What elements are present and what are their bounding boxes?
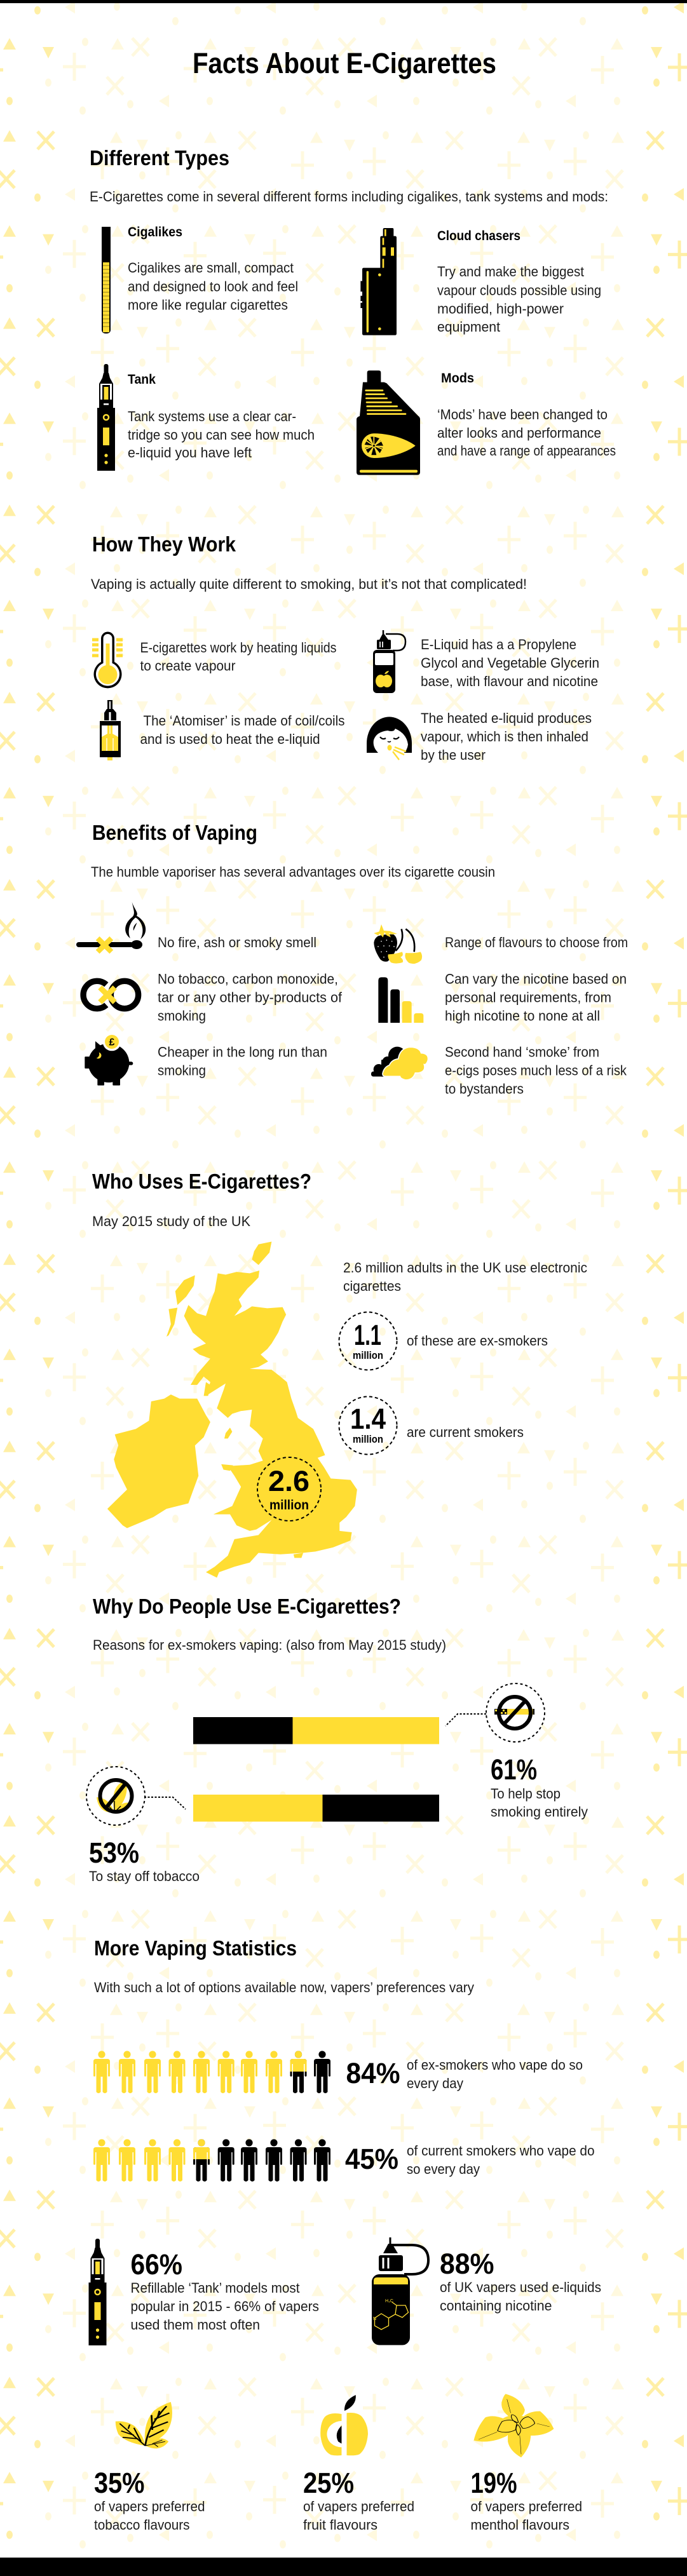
callout: 2.6 million xyxy=(257,1457,321,1521)
stat: 25%: 25% xyxy=(303,2467,354,2499)
text: second hand smoke: e-cigs poses much less of a risk xyxy=(445,1062,627,1079)
stat: 25%: of vapers preferred xyxy=(303,2498,414,2514)
stat: 45%: so every day xyxy=(407,2161,480,2177)
text: current smokers: are current smokers xyxy=(407,1424,524,1440)
text: heated e-liquid xyxy=(421,710,592,763)
icon: e-liquid bottle xyxy=(373,630,405,693)
callout: 1.1 million: 1.1 xyxy=(354,1319,381,1351)
text: cheaper: Cheaper in the long run than xyxy=(158,1044,327,1060)
icon: nicotine bars xyxy=(378,977,423,1023)
text: cigalikes: Cigalikes are small, compact xyxy=(128,260,294,276)
stat: 19% xyxy=(470,2467,582,2533)
stat: 88%: containing nicotine xyxy=(440,2298,552,2314)
text: nicotine: high nicotine to none at all xyxy=(445,1008,600,1024)
icon: thermometer xyxy=(92,632,123,688)
icon: apple xyxy=(320,2395,368,2455)
stat: 19%: menthol flavours xyxy=(470,2517,569,2533)
stat: 61%: To help stop xyxy=(491,1786,561,1802)
icon: nicotine e-liquid bottle xyxy=(372,2237,428,2345)
panel: why do people use xyxy=(86,1595,588,1884)
text: cigalikes xyxy=(128,225,298,313)
stat: 45% xyxy=(345,2143,595,2177)
icon: tobacco leaf xyxy=(116,2402,172,2448)
icon: atomiser xyxy=(100,700,121,760)
icon: piggy bank xyxy=(85,1033,133,1086)
text: tank xyxy=(128,372,315,461)
callout: 2.6 million: million xyxy=(269,1498,309,1513)
callout: 1.4 million: 1.4 xyxy=(350,1403,386,1435)
text: atomiser: and is used to heat the e-liquid xyxy=(140,731,320,747)
text: 2.6 million adults: cigarettes xyxy=(343,1278,401,1294)
stat: 66%: used them most often xyxy=(131,2317,260,2333)
text: cigalikes: Cigalikes xyxy=(128,225,182,239)
text: heated e-liquid: by the user xyxy=(421,747,486,763)
icon: piggy bank: £ xyxy=(109,1037,115,1048)
stat: 35%: of vapers preferred xyxy=(94,2498,205,2514)
text: atomiser: The ‘Atomiser’ is made of coil/coils xyxy=(144,713,344,729)
text: tank: tridge so you can see how much xyxy=(128,427,315,443)
heading: how they work: How They Work xyxy=(92,532,236,556)
stat: 88% xyxy=(440,2248,601,2314)
text: tank: Tank xyxy=(128,372,156,387)
stat: 45%: of current smokers who vape do xyxy=(407,2143,595,2159)
callout: 1.4 million: million xyxy=(353,1433,383,1445)
stat: 61%: smoking entirely xyxy=(491,1804,588,1819)
panel: benefits of vaping xyxy=(79,821,628,1096)
text: cloud chasers: equipment xyxy=(437,319,500,335)
panel: different types xyxy=(90,146,616,475)
text: heated e-liquid: vapour, which is then inhaled xyxy=(421,729,588,745)
bar chart: 61% xyxy=(193,1717,439,1744)
text: cloud chasers: modified, high-power xyxy=(437,301,564,316)
stat: 84% xyxy=(346,2057,583,2091)
icon: face exhaling vapour xyxy=(367,717,412,760)
text: nicotine xyxy=(445,971,627,1024)
top black bar xyxy=(0,0,687,3)
stat: 66% xyxy=(131,2248,319,2333)
text: mods xyxy=(437,371,616,459)
callout: 1.1 million xyxy=(339,1312,397,1370)
text: nicotine: personal requirements, from xyxy=(445,990,611,1005)
icon: refillable tank xyxy=(89,2239,107,2345)
text: cloud chasers xyxy=(437,229,601,335)
stat: 19%: 19% xyxy=(470,2467,517,2499)
text: second hand smoke xyxy=(445,1044,627,1096)
text: nicotine: Can vary the nicotine based on xyxy=(445,971,627,987)
stat: 25% xyxy=(303,2467,414,2533)
text: atomiser xyxy=(140,713,344,747)
text: e-liquid xyxy=(421,637,599,689)
panel: more vaping statistics xyxy=(89,1936,601,2533)
intro: who uses: May 2015 study of the UK xyxy=(92,1213,250,1229)
text: e-liquid: E-Liquid has a a Propylene xyxy=(421,637,576,652)
icon: strawberry and cherries xyxy=(374,924,422,964)
heading: different types: Different Types xyxy=(90,146,229,170)
callout: 2.6 million: 2.6 xyxy=(268,1465,309,1497)
text: mods: ‘Mods’ have been changed to xyxy=(437,407,608,422)
text: no fire: No fire, ash or smoky smell xyxy=(158,934,316,950)
stat: 66%: popular in 2015 - 66% of vapers xyxy=(131,2298,319,2314)
stat: 61% xyxy=(491,1753,588,1819)
icon: mods bottle xyxy=(357,370,420,475)
text: cigalikes: more like regular cigarettes xyxy=(128,297,288,313)
stat: 45%: 45% xyxy=(345,2143,398,2175)
stat: 88%: 88% xyxy=(440,2248,494,2280)
text: cheaper xyxy=(158,1044,327,1079)
intro: benefits: The humble vaporiser has several advantages over its cigarette cousin xyxy=(91,864,495,880)
stat: 53% xyxy=(89,1837,200,1884)
text: second hand smoke: to bystanders xyxy=(445,1081,524,1096)
text: cloud chasers: Cloud chasers xyxy=(437,229,520,243)
intro: how they work: Vaping is actually quite different to smoking, but it’s not that complicated! xyxy=(91,576,527,592)
stat: 19%: of vapers preferred xyxy=(470,2498,582,2514)
title: Facts About E-Cigarettes xyxy=(193,47,496,79)
heading: benefits: Benefits of Vaping xyxy=(92,821,257,844)
stat: 88%: of UK vapers used e-liquids xyxy=(440,2279,601,2295)
panel: who uses e-cigarettes xyxy=(92,1170,587,1578)
stat: 66%: Refillable ‘Tank’ models most xyxy=(131,2280,300,2296)
text: tank: Tank systems use a clear car- xyxy=(128,408,296,424)
text: ex-smokers: of these are ex-smokers xyxy=(407,1333,548,1349)
text: no tobacco: tar or any other by-products of xyxy=(158,990,343,1005)
heading: why do people use: Why Do People Use E-Cigarettes? xyxy=(93,1595,401,1618)
stat: 66%: 66% xyxy=(131,2248,182,2281)
icon: menthol leaves xyxy=(473,2394,554,2457)
text: cheaper: smoking xyxy=(158,1062,206,1079)
pictogram: 45% of ten people xyxy=(93,2139,330,2182)
text: tank: e-liquid you have left xyxy=(128,445,252,461)
text: 2.6 million adults xyxy=(343,1260,587,1294)
stat: 61%: 61% xyxy=(491,1753,537,1786)
text: heating liquids: E-cigarettes work by heating liquids xyxy=(140,640,337,656)
text: heating liquids: to create vapour xyxy=(140,658,235,673)
icon: cigalike xyxy=(102,227,111,334)
stat: 25%: fruit flavours xyxy=(303,2517,378,2533)
intro: different types: E-Cigarettes come in several different forms including cigalikes, tank systems and mods: xyxy=(90,189,608,205)
text: cloud chasers: Try and make the biggest xyxy=(437,264,584,280)
bottom black bar xyxy=(0,2558,687,2576)
stat: 84%: 84% xyxy=(346,2057,400,2089)
icon: vapour cloud xyxy=(371,1047,428,1080)
stat: 84%: every day xyxy=(407,2075,463,2091)
heading: more vaping statistics: More Vaping Statistics xyxy=(94,1936,297,1960)
bar chart: 53% xyxy=(193,1795,439,1822)
intro: preferences: With such a lot of options available now, vapers’ preferences vary xyxy=(94,1979,474,1995)
stat: 84%: of ex-smokers who vape do so xyxy=(407,2057,583,2073)
text: no tobacco: smoking xyxy=(158,1008,206,1024)
text: flavours: Range of flavours to choose from xyxy=(445,934,628,950)
icon: tank xyxy=(97,364,115,471)
callout: 1.1 million: million xyxy=(353,1349,383,1361)
text: mods: and have a range of appearances xyxy=(437,443,616,459)
intro: reasons: Reasons for ex-smokers vaping: (also from May 2015 study) xyxy=(93,1637,446,1653)
text: no tobacco xyxy=(158,971,343,1024)
text: e-liquid: base, with flavour and nicotine xyxy=(421,673,598,689)
text: no tobacco: No tobacco, carbon monoxide, xyxy=(158,971,338,987)
icon: crossed carbon rings xyxy=(83,981,139,1009)
text: cloud chasers: vapour clouds possible using xyxy=(437,282,601,299)
text: e-liquid: Glycol and Vegetable Glycerin xyxy=(421,655,599,671)
stat: 53%: 53% xyxy=(89,1837,139,1869)
heading: who uses: Who Uses E-Cigarettes? xyxy=(92,1170,311,1193)
icon: crossed cigarette with flame xyxy=(79,902,146,952)
icon: no tobacco xyxy=(86,1767,186,1825)
molecule: N xyxy=(373,2317,376,2321)
stat: 35%: tobacco flavours xyxy=(94,2517,189,2533)
text: heating liquids xyxy=(140,640,337,673)
stat: 35%: 35% xyxy=(94,2467,145,2499)
text: 2.6 million adults: 2.6 million adults in the UK use electronic xyxy=(343,1260,587,1276)
text: mods: Mods xyxy=(441,371,474,386)
stat: 53%: To stay off tobacco xyxy=(89,1868,200,1884)
text: second hand smoke: Second hand ‘smoke’ from xyxy=(445,1044,599,1060)
text: mods: alter looks and performance xyxy=(437,425,601,441)
panel: how they work xyxy=(91,532,599,763)
callout: 1.4 million xyxy=(339,1396,397,1455)
map: UK and Ireland xyxy=(107,1241,357,1578)
text: cigalikes: and designed to look and feel xyxy=(128,278,298,295)
molecule xyxy=(373,2299,408,2330)
stat: 35% xyxy=(94,2467,205,2533)
molecule: H₃C xyxy=(385,2299,393,2303)
text: heated e-liquid: The heated e-liquid produces xyxy=(421,710,592,726)
icon: cloud chaser mod xyxy=(360,228,397,335)
icon: no smoking xyxy=(446,1683,545,1742)
pictogram: 84% of ten people xyxy=(93,2051,330,2093)
